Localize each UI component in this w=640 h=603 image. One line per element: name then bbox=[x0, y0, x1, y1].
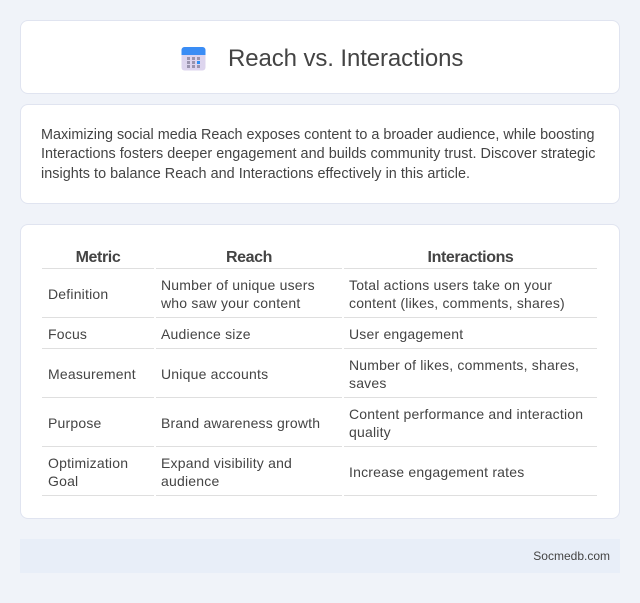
row: Purpose: quality bbox=[349, 424, 391, 440]
row: Optimization Goal: Increase engagement rates bbox=[349, 464, 524, 480]
footer bbox=[20, 539, 620, 573]
intro text: Interactions fosters deeper engagement and builds community trust. Discover strategic bbox=[41, 146, 595, 162]
row: Optimization Goal: Goal bbox=[48, 473, 78, 489]
row: Focus: User engagement bbox=[349, 326, 463, 342]
row: Focus: Audience size bbox=[161, 326, 251, 342]
row: Measurement: Measurement bbox=[48, 366, 136, 382]
row: Optimization Goal: Expand visibility and bbox=[161, 455, 292, 471]
row: Measurement bbox=[48, 357, 579, 391]
table header bbox=[76, 249, 514, 266]
row: Optimization Goal: Optimization bbox=[48, 455, 128, 471]
row: Purpose: Purpose bbox=[48, 415, 102, 431]
intro text: Maximizing social media Reach exposes content to a broader audience, while boosting bbox=[41, 127, 595, 143]
footer text: Socmedb.com bbox=[533, 549, 610, 563]
row: Definition: Total actions users take on your bbox=[349, 277, 552, 293]
row: Measurement: Unique accounts bbox=[161, 366, 268, 382]
row: Purpose: Content performance and interaction bbox=[349, 406, 583, 422]
table header: Interactions bbox=[428, 249, 513, 266]
table header: Reach bbox=[226, 249, 272, 266]
intro text bbox=[41, 127, 595, 182]
row: Definition bbox=[48, 277, 565, 311]
table header: Metric bbox=[76, 249, 120, 266]
row: Definition: who saw your content bbox=[161, 295, 300, 311]
row: Optimization Goal bbox=[48, 455, 524, 489]
panel: intro bbox=[20, 104, 620, 204]
panel: comparison table bbox=[20, 224, 620, 519]
row: Focus: Focus bbox=[48, 326, 87, 342]
panel: title card bbox=[20, 20, 620, 94]
intro text: insights to balance Reach and Interactions effectively in this article. bbox=[41, 166, 470, 182]
row: Optimization Goal: audience bbox=[161, 473, 219, 489]
row: Definition: Number of unique users bbox=[161, 277, 315, 293]
icon: calendar bbox=[182, 47, 206, 70]
row: Definition: Definition bbox=[48, 286, 108, 302]
row: Purpose: Brand awareness growth bbox=[161, 415, 320, 431]
row: Focus bbox=[48, 326, 464, 342]
row: Measurement: Number of likes, comments, shares, bbox=[349, 357, 579, 373]
row: Definition: content (likes, comments, shares) bbox=[349, 295, 565, 311]
row: Measurement: saves bbox=[349, 375, 387, 391]
title: Reach vs. Interactions bbox=[228, 45, 463, 72]
row: Purpose bbox=[48, 406, 583, 440]
